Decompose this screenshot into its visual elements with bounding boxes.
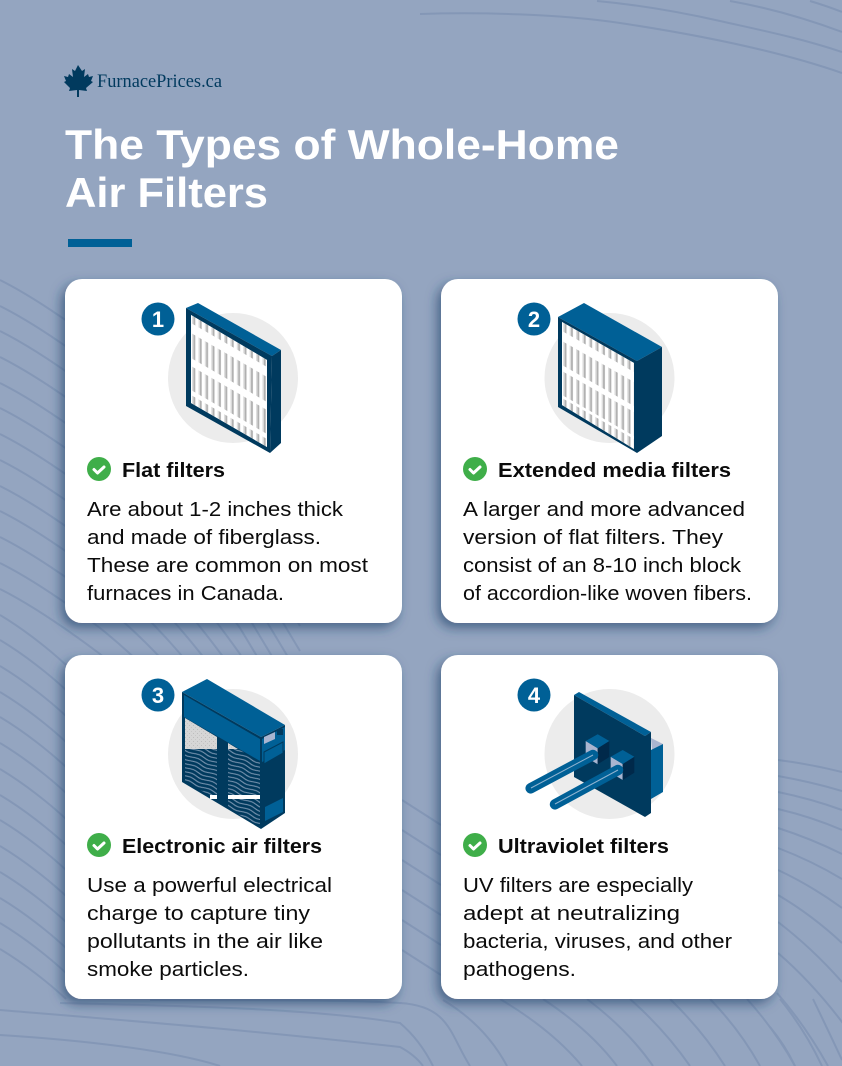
card background [441,655,778,999]
panel: ultraviolet filters [441,655,778,999]
title: Air Filters [65,169,268,216]
body text: of accordion-like woven fibers. [463,582,752,605]
panel: extended media filters [441,279,778,623]
body text: pollutants in the air like [87,930,323,953]
number badge 3: 3 [152,683,164,708]
body text: smoke particles. [87,958,249,981]
body text: UV filters are especially [463,874,694,897]
body text [87,498,368,605]
title [65,121,619,216]
body text: furnaces in Canada. [87,582,284,605]
heading: Flat filters [122,459,225,482]
number badge 2 [518,302,550,336]
title underline [68,239,132,247]
body text: These are common on most [87,554,368,577]
number badge 2: 2 [528,307,540,332]
card background [441,279,778,623]
body text [463,498,752,605]
icon: green check [463,457,487,481]
number badge 4: 4 [528,683,541,708]
icon: ultraviolet filter [531,689,674,819]
number badge 1 [142,302,174,336]
title: The Types of Whole-Home [65,121,619,168]
body text: bacteria, viruses, and other [463,930,732,953]
icon: green check [463,833,487,857]
body text: pathogens. [463,958,576,981]
body text [463,874,732,981]
heading: Ultraviolet filters [498,835,669,858]
panel: electronic air filters [65,655,402,999]
icon: maple leaf [64,65,93,97]
body text [87,874,332,981]
logo: FurnacePrices.ca [64,65,223,97]
icon: flat filter [168,303,298,453]
card background [65,655,402,999]
logo wordmark: FurnacePrices.ca [97,71,223,92]
number badge 3 [142,678,174,712]
card background [65,279,402,623]
body text: A larger and more advanced [463,498,745,521]
heading: Electronic air filters [122,835,322,858]
icon: green check [87,833,111,857]
body text: Use a powerful electrical [87,874,332,897]
body text: adept at neutralizing [463,902,680,925]
icon: electronic air filter [168,679,298,829]
body text: version of flat filters. They [463,526,724,549]
number badge 4 [518,678,550,712]
body text: consist of an 8-10 inch block [463,554,742,577]
panel: flat filters [65,279,402,623]
heading: Extended media filters [498,459,731,482]
body text: Are about 1-2 inches thick [87,498,344,521]
body text: and made of fiberglass. [87,526,321,549]
body text: charge to capture tiny [87,902,311,925]
icon: extended media filter [544,303,674,453]
number badge 1: 1 [152,307,164,332]
icon: green check [87,457,111,481]
